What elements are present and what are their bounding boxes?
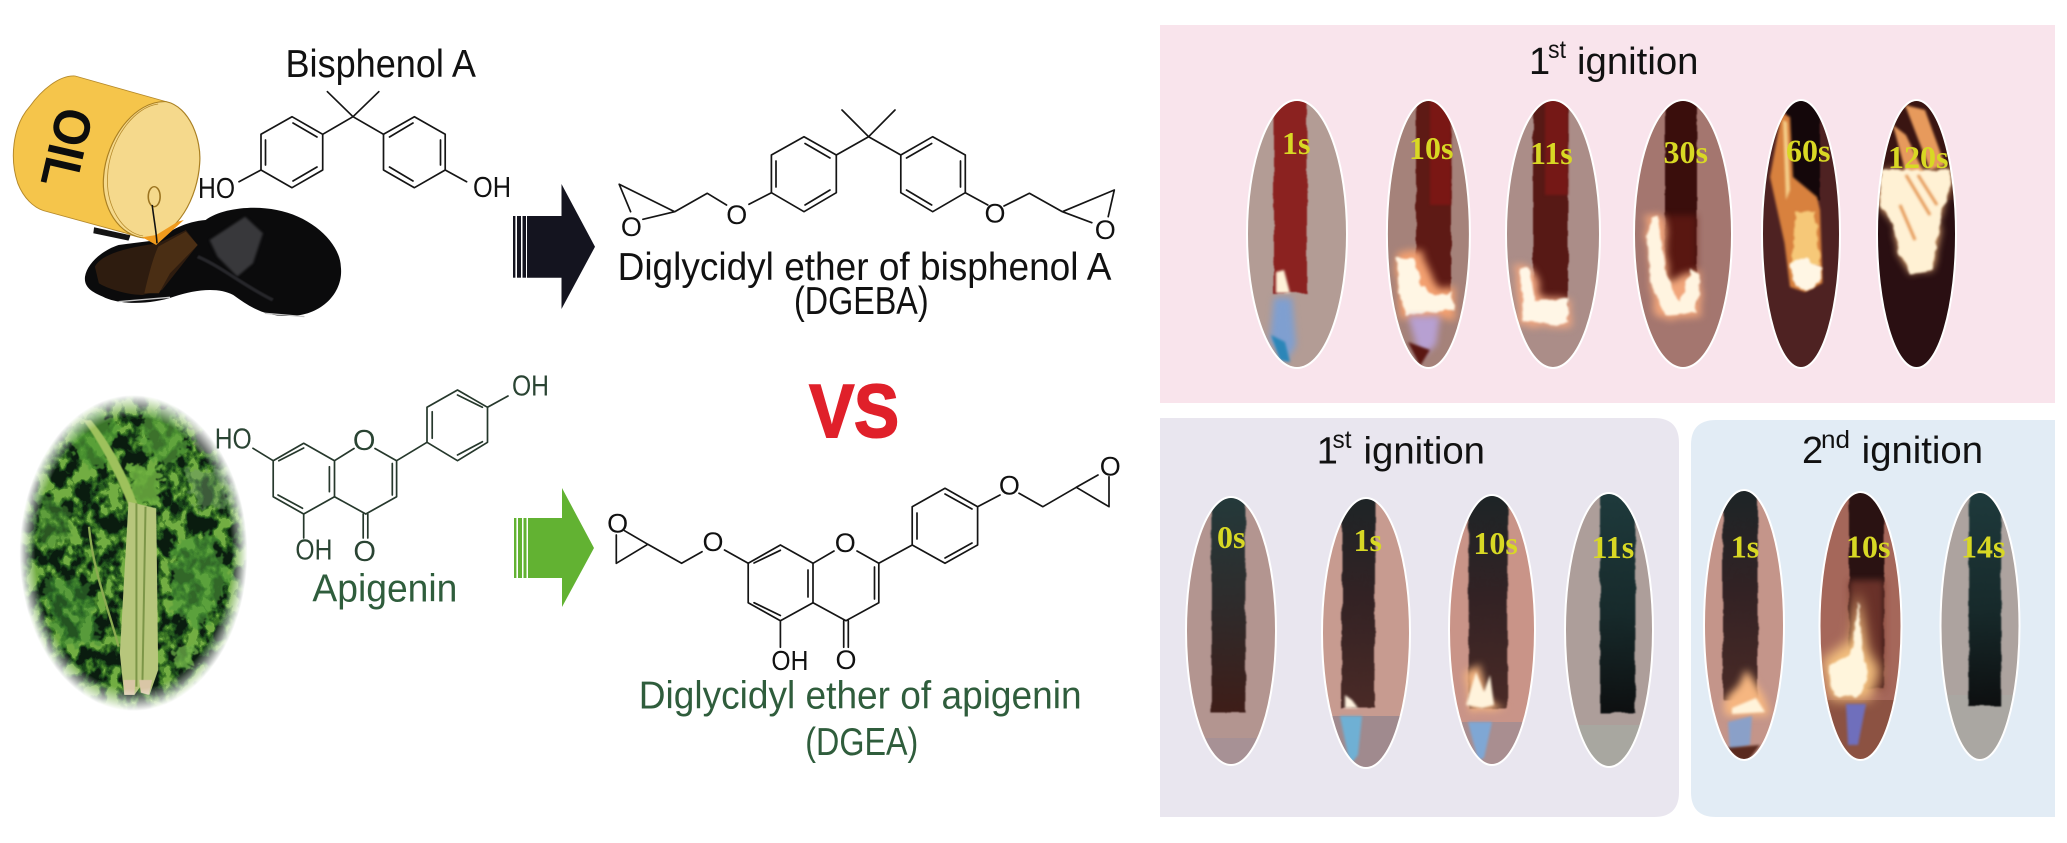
sample photo: 1s <box>1246 99 1348 369</box>
heading: 2nd ignition: 2 <box>1802 430 1823 472</box>
chemical structure: bisphenol A: OH <box>473 172 511 204</box>
text: Diglycidyl ether of apigenin (DGEA) <box>639 674 1082 764</box>
sample photo: 10s <box>1815 488 1905 763</box>
panel: DGEBA first ignition (pink) <box>1160 25 2055 403</box>
chemical structure: DGEA: O <box>835 528 856 558</box>
sample photo: 10s: 10s <box>1473 525 1518 561</box>
heading: 1st ignition: st <box>1548 36 1566 64</box>
chemical structure: DGEBA <box>619 110 1116 245</box>
chemical structure: apigenin <box>215 371 549 568</box>
sample photo: 120s: 120s <box>1888 139 1948 175</box>
heading: Bisphenol A: Bisphenol A <box>286 43 476 86</box>
sample photo: 11s <box>1564 492 1654 768</box>
sample photo: 10s <box>1386 99 1471 369</box>
chemical structure: DGEA <box>607 452 1121 676</box>
chemical structure: apigenin: O <box>353 425 375 457</box>
text: Apigenin: Apigenin <box>312 568 457 611</box>
heading: 1st ignition <box>1317 426 1485 472</box>
sample photo: 60s: 60s <box>1786 133 1830 169</box>
heading: 1st ignition: ignition <box>1364 430 1485 472</box>
chemical structure: DGEBA: O <box>621 212 642 242</box>
text: Diglycidyl ether of bisphenol A (DGEBA): (DGEBA) <box>794 280 929 323</box>
sample photo: 1s <box>1700 488 1788 765</box>
sample photo: 60s <box>1761 99 1841 369</box>
chemical structure: DGEA: O <box>999 470 1020 500</box>
chemical structure: DGEBA: O <box>984 198 1006 228</box>
icon: oil barrel pouring into spill <box>13 76 341 317</box>
sample photo: 0s: 0s <box>1217 519 1245 555</box>
chemical structure: DGEA: O <box>607 508 628 538</box>
chemical structure: DGEA: O <box>702 527 724 557</box>
text: Diglycidyl ether of bisphenol A (DGEBA): Diglycidyl ether of bisphenol A <box>618 246 1111 289</box>
sample photo: 0s <box>1185 496 1277 766</box>
sample photo: 120s <box>1876 99 1957 369</box>
sample photo: 1s: 1s <box>1282 125 1310 161</box>
chemical structure: bisphenol A: HO <box>198 173 235 205</box>
sample photo: 14s <box>1940 491 2020 761</box>
heading: 1st ignition: st <box>1332 426 1352 454</box>
chemical structure: DGEA: O <box>835 645 857 675</box>
sample photo: 11s <box>1505 99 1601 369</box>
text: Diglycidyl ether of apigenin (DGEA): (DGEA) <box>805 721 918 764</box>
text: Diglycidyl ether of apigenin (DGEA): Diglycidyl ether of apigenin <box>639 674 1082 717</box>
heading: 1st ignition <box>1529 36 1698 83</box>
chemical structure: DGEA: O <box>1100 452 1121 482</box>
chemical structure: apigenin: OH <box>295 534 332 566</box>
sample photo: 30s <box>1630 95 1735 375</box>
sample photo: 1s <box>1321 497 1411 769</box>
arrow: black reaction arrow <box>513 184 595 309</box>
sample photo: 1s: 1s <box>1354 522 1382 558</box>
heading: 2nd ignition: nd <box>1821 426 1850 454</box>
heading: 1st ignition: 1 <box>1529 41 1550 83</box>
sample photo: 14s: 14s <box>1961 529 2005 565</box>
panel: DGEA second ignition (light blue) <box>1691 420 2055 817</box>
chemical structure: apigenin: OH <box>512 371 549 403</box>
celery stalks <box>83 420 158 695</box>
sample photo: 10s: 10s <box>1846 529 1890 565</box>
heading: 2nd ignition: ignition <box>1862 430 1983 472</box>
arrow: green reaction arrow <box>514 488 594 607</box>
bung hole <box>148 187 160 207</box>
sample photo: 30s: 30s <box>1664 134 1708 170</box>
sample photo: 10s <box>1448 494 1536 766</box>
chemical structure: apigenin: HO <box>215 423 252 455</box>
chemical structure: apigenin: O <box>353 536 376 568</box>
barrel body <box>13 76 200 238</box>
chemical structure: DGEA: OH <box>771 645 808 676</box>
photo: celery plant <box>20 396 247 710</box>
label: OIL: OIL <box>29 102 103 193</box>
chemical structure: DGEBA: O <box>1095 215 1116 245</box>
heading: 1st ignition: 1 <box>1317 430 1338 472</box>
sample photo: 10s: 10s <box>1409 130 1453 166</box>
chemical structure: bisphenol A <box>198 92 511 205</box>
oil spill puddle <box>85 208 341 317</box>
barrel lid <box>103 102 200 238</box>
sample photo: 1s: 1s <box>1731 529 1759 565</box>
chemical structure: DGEBA: O <box>726 200 747 230</box>
text: Diglycidyl ether of bisphenol A (DGEBA) <box>618 246 1111 323</box>
sample photo: 11s: 11s <box>1592 529 1634 565</box>
text: VS: VS <box>809 369 899 453</box>
leaf clusters <box>36 407 233 667</box>
sample photo: 11s: 11s <box>1530 135 1573 171</box>
heading: 2nd ignition <box>1802 426 1983 472</box>
panel: DGEA first ignition (lavender) <box>1160 418 1679 817</box>
heading: 1st ignition: ignition <box>1577 41 1698 83</box>
